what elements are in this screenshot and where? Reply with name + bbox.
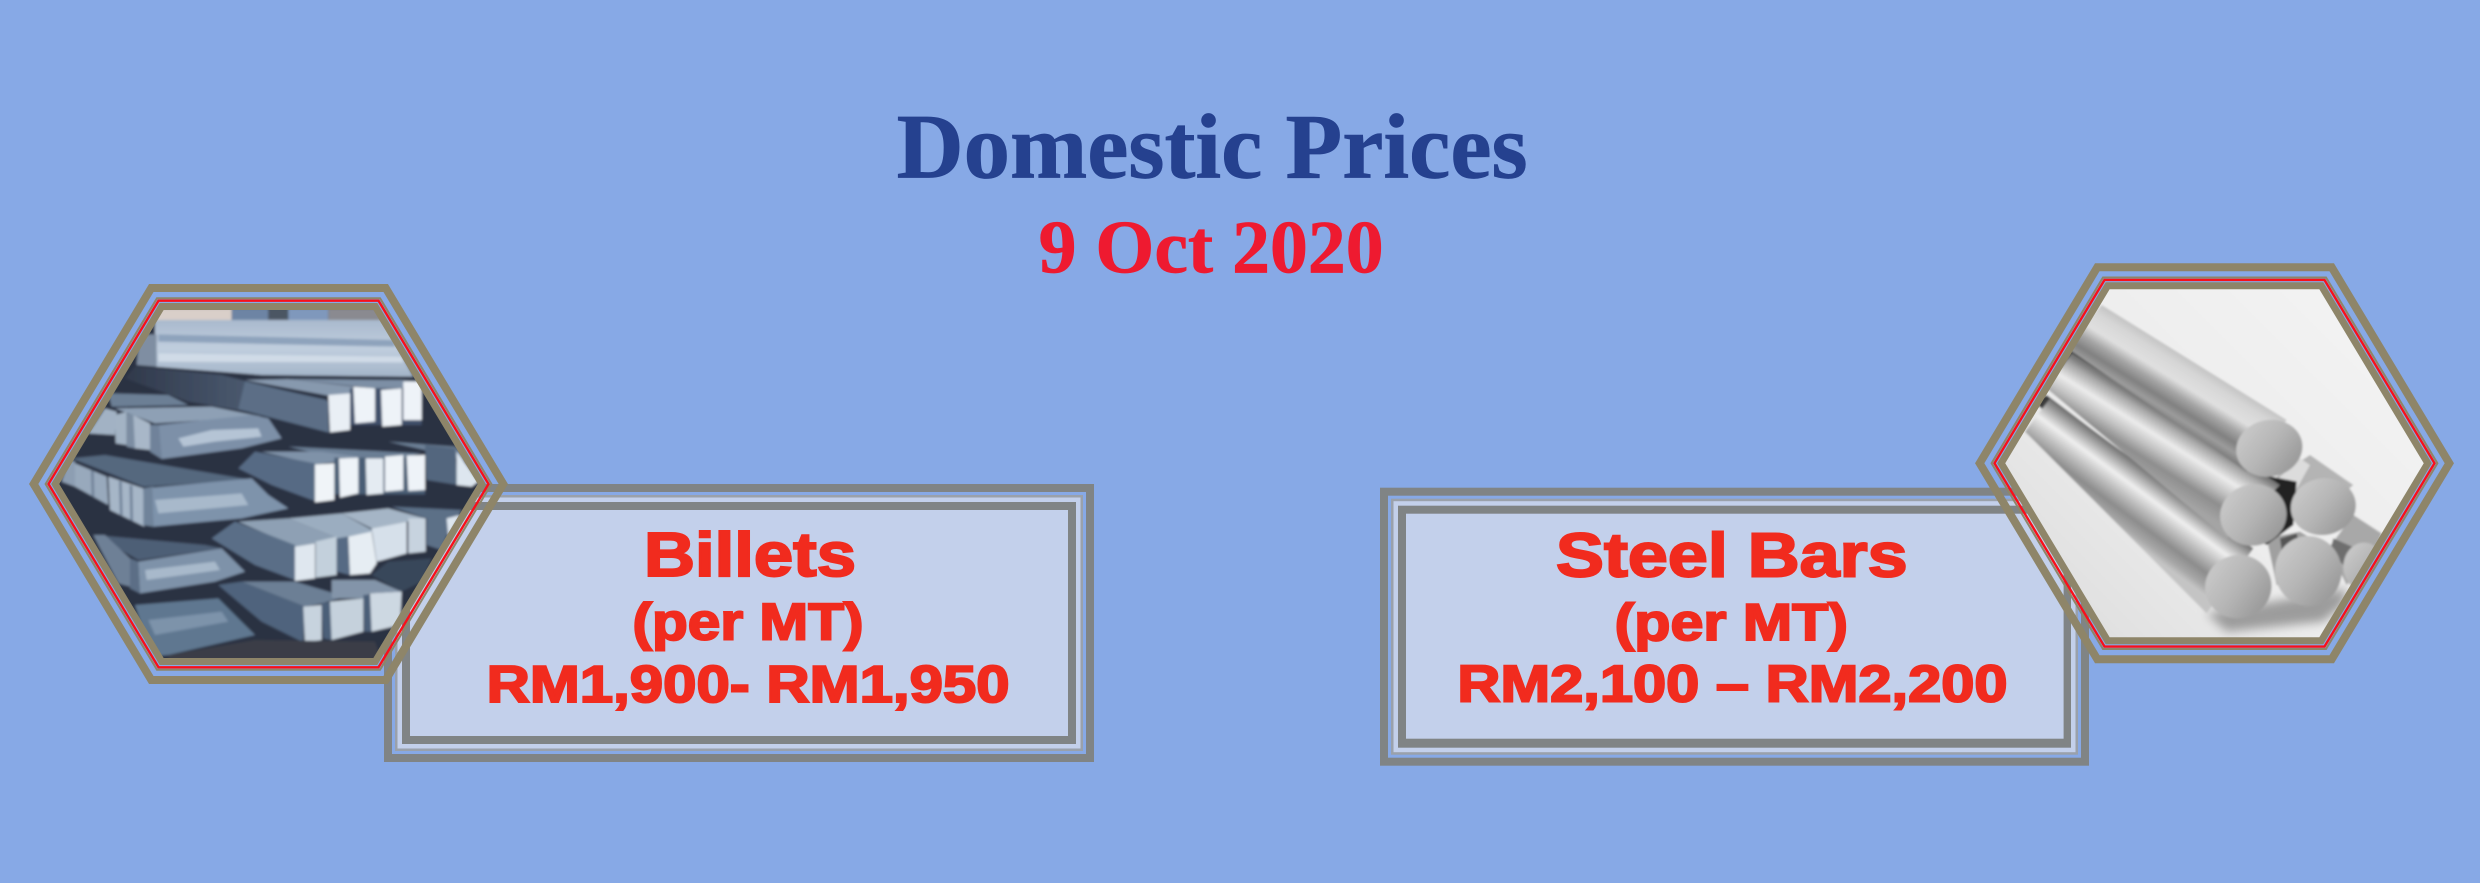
text: billets price: RM1,900- RM1,950 — [487, 656, 1010, 714]
heading: steel bars: Steel Bars — [1556, 521, 1908, 590]
bars row 4 left — [95, 535, 222, 560]
panel: steel bars price box — [1380, 488, 2089, 766]
icon: billets hexagon photo — [34, 288, 503, 680]
panel: billets price box — [384, 484, 1094, 762]
bars row 2 right — [288, 447, 422, 459]
bars row 3 right — [342, 508, 425, 528]
rod 1 — [2065, 305, 2287, 472]
title: Domestic Prices — [897, 96, 1528, 198]
bars row 5 — [372, 558, 432, 592]
date: 9 Oct 2020 — [1039, 207, 1384, 290]
text: steel bars unit: (per MT) — [1615, 594, 1848, 652]
bars row 1 — [128, 367, 329, 414]
rod 2 — [2062, 350, 2108, 376]
bars row 3 left — [72, 455, 252, 487]
top slab — [155, 320, 413, 377]
heading: billets: Billets — [644, 521, 856, 590]
icon: steel bars hexagon photo — [1980, 267, 2449, 659]
text: billets unit: (per MT) — [632, 594, 864, 652]
bars row 2 left — [108, 393, 188, 407]
bars bottom — [135, 598, 255, 657]
back rods — [2328, 515, 2382, 585]
text: steel bars price: RM2,100 – RM2,200 — [1457, 656, 2008, 714]
rod 3 — [2038, 394, 2082, 422]
